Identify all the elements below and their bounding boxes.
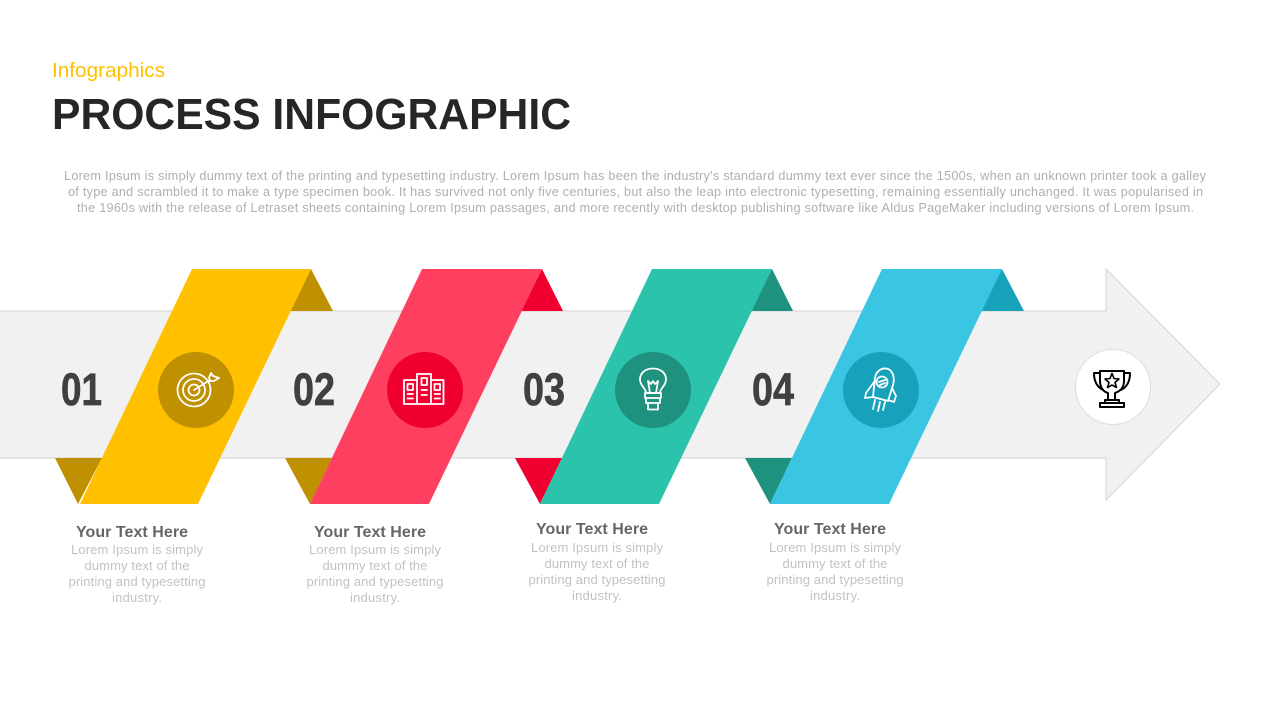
subtitle: Infographics xyxy=(52,60,165,82)
step 1 ribbon xyxy=(55,269,333,504)
intro text block: the 1960s with the release of Letraset sheets containing Lorem Ipsum passages, and more recently with desktop publishing software like Aldus PageMaker including versions of Lorem Ipsum. xyxy=(77,201,1194,215)
ribbon 3 upper fold xyxy=(751,269,793,311)
step 1 caption: Your Text Here xyxy=(76,524,188,541)
step 2 caption: dummy text of the xyxy=(322,558,428,573)
step 2 caption xyxy=(306,524,444,605)
step 1 caption: Lorem Ipsum is simply xyxy=(71,542,204,557)
icon: light bulb xyxy=(640,368,666,410)
step 2 caption: industry. xyxy=(350,590,400,605)
intro text block xyxy=(64,169,1207,215)
step 3 caption: dummy text of the xyxy=(544,556,650,571)
ribbon 2 upper fold xyxy=(521,269,563,311)
step 4 icon circle xyxy=(843,352,919,428)
step 3 caption xyxy=(528,521,666,603)
ribbon 4 lower fold xyxy=(745,458,792,504)
step 3 caption: industry. xyxy=(572,588,622,603)
step 1 caption: dummy text of the xyxy=(84,558,190,573)
step 3 number: 03 xyxy=(523,364,565,415)
step 2 number: 02 xyxy=(293,364,335,415)
step 3 caption: Lorem Ipsum is simply xyxy=(531,540,664,555)
intro text block: of type and scrambled it to make a type specimen book. It has survived not only five centuries, but also the leap into electronic typesetting, remaining essentially unchanged. It was popularised in xyxy=(68,185,1203,199)
title: PROCESS INFOGRAPHIC xyxy=(52,90,571,139)
icon: trophy xyxy=(1094,371,1130,407)
step 4 caption: industry. xyxy=(810,588,860,603)
icon: rocket xyxy=(865,368,896,411)
step 4 caption: Your Text Here xyxy=(774,521,886,538)
step 2 icon circle xyxy=(387,352,463,428)
icon: buildings xyxy=(404,374,444,404)
step 3 caption: printing and typesetting xyxy=(528,572,666,587)
step 4 ribbon xyxy=(745,269,1024,504)
step 2 ribbon xyxy=(285,269,563,504)
ribbon 3 lower fold xyxy=(515,458,562,504)
intro text block: Lorem Ipsum is simply dummy text of the printing and typesetting industry. Lorem Ipsum has been the industry's standard dummy text ever since the 1500s, when an unknown printer took a galley xyxy=(64,169,1207,183)
step 1 caption xyxy=(68,524,206,605)
step 4 caption: Lorem Ipsum is simply xyxy=(769,540,902,555)
step 1 icon circle xyxy=(158,352,234,428)
ribbon 2 lower fold xyxy=(285,458,332,504)
step 2 caption: Your Text Here xyxy=(314,524,426,541)
step 3 caption: Your Text Here xyxy=(536,521,648,538)
ribbon 4 band xyxy=(770,269,1002,504)
step 4 caption xyxy=(766,521,904,603)
step 1 caption: industry. xyxy=(112,590,162,605)
step 4 caption: printing and typesetting xyxy=(766,572,904,587)
ribbon 2 band xyxy=(310,269,542,504)
ribbon 1 band xyxy=(80,269,311,504)
process arrow background xyxy=(0,269,1220,500)
icon: target xyxy=(178,373,219,406)
ribbon 1 folds xyxy=(55,269,333,504)
step 3 ribbon xyxy=(515,269,793,504)
goal circle xyxy=(1076,350,1150,424)
step 2 caption: printing and typesetting xyxy=(306,574,444,589)
ribbon 3 band xyxy=(540,269,772,504)
step 1 number: 01 xyxy=(61,364,102,415)
step 2 caption: Lorem Ipsum is simply xyxy=(309,542,442,557)
step 1 caption: printing and typesetting xyxy=(68,574,206,589)
ribbon 4 upper fold xyxy=(981,269,1024,311)
step 4 caption: dummy text of the xyxy=(782,556,888,571)
step 4 number: 04 xyxy=(752,364,794,415)
step 3 icon circle xyxy=(615,352,691,428)
